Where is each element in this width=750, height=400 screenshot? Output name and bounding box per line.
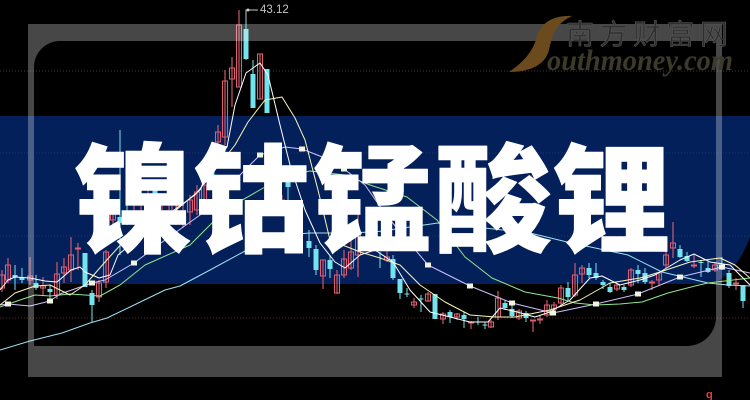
watermark site name: outhmoney.com bbox=[547, 44, 733, 77]
title: 酸 bbox=[434, 137, 552, 269]
title: 镍 bbox=[74, 137, 192, 269]
title: 钴 bbox=[192, 137, 310, 269]
MA10 yellow line bbox=[0, 97, 750, 317]
dotted grid lines bbox=[0, 71, 750, 318]
watermark swoosh S bbox=[509, 16, 572, 72]
title: 锰 bbox=[313, 137, 431, 269]
cyan candles bbox=[15, 10, 743, 329]
watermark logo bbox=[509, 16, 734, 77]
navy title band bbox=[0, 116, 750, 284]
MA60 light blue line bbox=[0, 223, 750, 350]
MA5 white line bbox=[0, 63, 750, 322]
MA30 green line bbox=[0, 171, 750, 307]
moving average tick markers bbox=[5, 149, 725, 313]
watermark Chinese name: 南方财富网 bbox=[566, 19, 734, 50]
peak price label bbox=[246, 4, 289, 20]
moving average lines bbox=[0, 63, 750, 350]
peak price label: 43.12 bbox=[260, 4, 289, 16]
title: 锂 bbox=[553, 137, 671, 269]
title bbox=[74, 137, 671, 269]
MA20 lavender line bbox=[0, 147, 750, 313]
red candles bbox=[0, 10, 738, 332]
